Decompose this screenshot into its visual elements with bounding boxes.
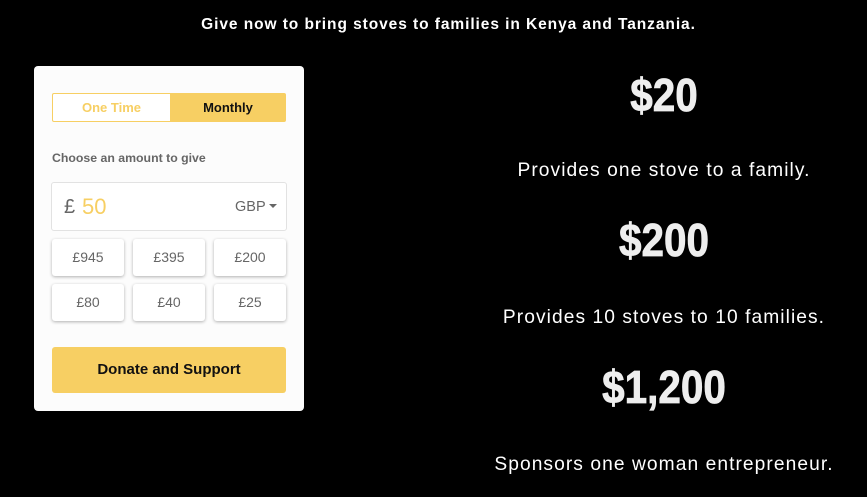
preset amount: 200 (214, 239, 286, 276)
price: $20: $20 (630, 69, 698, 121)
preset amount: 40: £40 (157, 294, 181, 310)
panel: donation form (34, 66, 304, 411)
preset amount: 25 (214, 284, 286, 321)
price: $1,200: $1,200 (602, 361, 726, 413)
donate button: Donate and Support (97, 361, 241, 378)
donate button (52, 347, 286, 393)
currency symbol: £ (64, 196, 75, 218)
description: $200: Provides 10 stoves to 10 families. (503, 307, 825, 328)
price: $200: $200 (619, 214, 709, 266)
preset amount: 945 (52, 239, 124, 276)
preset amount: 40 (133, 284, 205, 321)
toggle option: monthly (170, 93, 286, 122)
currency selector: GBP (235, 199, 266, 215)
icon: dropdown caret (269, 204, 277, 208)
preset amount: 395 (133, 239, 205, 276)
description: $1,200: Sponsors one woman entrepreneur. (494, 454, 834, 475)
description: $20: Provides one stove to a family. (517, 160, 811, 181)
preset amount: 25: £25 (238, 294, 262, 310)
toggle option: monthly: Monthly (203, 100, 253, 115)
amount input (51, 182, 287, 231)
title: Give now to bring stoves to families in Kenya and Tanzania. (201, 16, 696, 33)
amount label: Choose an amount to give (52, 151, 206, 165)
preset amount: 200: £200 (234, 249, 266, 265)
preset amount: 945: £945 (72, 249, 104, 265)
amount value: 50 (82, 194, 106, 219)
preset amount: 80: £80 (76, 294, 100, 310)
frequency toggle (52, 93, 286, 122)
toggle option: one time: One Time (82, 100, 141, 115)
toggle option: one time (52, 93, 170, 122)
preset amount: 80 (52, 284, 124, 321)
preset amount: 395: £395 (153, 249, 185, 265)
